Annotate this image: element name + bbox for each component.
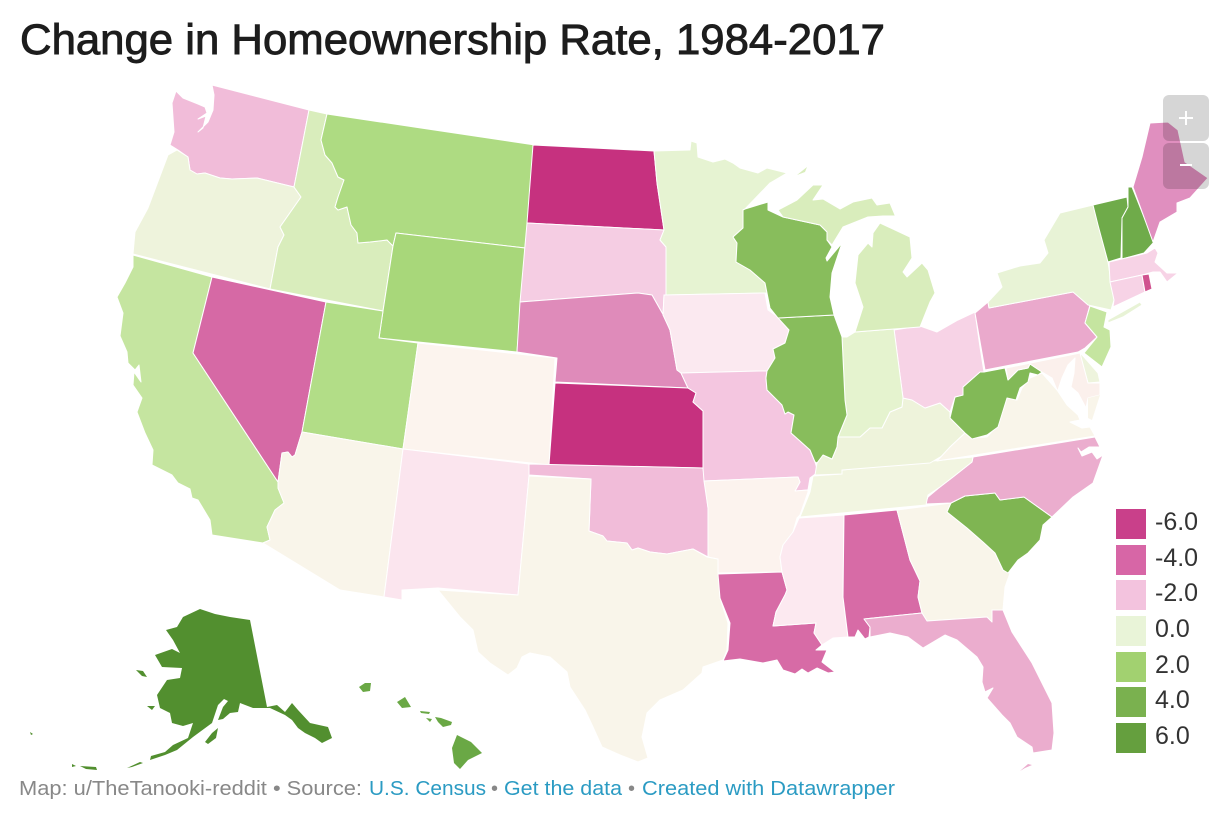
state: Wyoming	[379, 233, 525, 352]
state: Vermont	[1093, 197, 1128, 262]
state: Mississippi	[773, 515, 848, 645]
legend item: 4.0	[1116, 686, 1190, 717]
state: Tennessee	[800, 457, 973, 517]
state: Delaware	[1079, 352, 1100, 383]
state: West Virginia	[950, 347, 1042, 439]
footer credits: U.S. Census	[369, 778, 486, 800]
state: Nevada	[193, 277, 326, 482]
legend item: -6.0: -6.0	[1155, 508, 1198, 536]
legend item: 2.0: 2.0	[1155, 651, 1190, 679]
state: Wisconsin	[733, 202, 842, 318]
state: Missouri	[681, 371, 818, 491]
state: Michigan lower peninsula	[855, 223, 935, 332]
legend item: 0.0: 0.0	[1155, 615, 1190, 643]
legend item: -6.0	[1116, 508, 1198, 539]
footer credits: Map: u/TheTanooki-reddit • Source:	[19, 778, 362, 800]
state: Hawaii	[359, 683, 482, 769]
state: New Jersey	[1084, 306, 1111, 367]
legend item: 2.0	[1116, 651, 1190, 682]
Alaska mainland	[150, 609, 332, 760]
state: Virginia	[937, 373, 1095, 461]
legend item: 4.0: 4.0	[1155, 686, 1190, 714]
legend item: 6.0: 6.0	[1155, 722, 1190, 750]
Hawaii islands	[359, 683, 482, 769]
state: Pennsylvania	[975, 292, 1097, 370]
state: Louisiana	[718, 572, 835, 674]
state: Kentucky	[815, 398, 965, 475]
title: Change in Homeownership Rate, 1984-2017	[20, 16, 885, 64]
state: Arizona	[263, 432, 403, 597]
state: Idaho	[270, 110, 393, 311]
zoom control: minus button	[1163, 143, 1209, 189]
footer credits	[19, 778, 895, 800]
state: Oregon	[133, 150, 301, 289]
legend item: -4.0: -4.0	[1155, 544, 1198, 572]
legend item: -4.0	[1116, 544, 1198, 575]
footer credits: •	[628, 778, 635, 800]
legend	[1116, 508, 1198, 753]
state: California	[117, 255, 284, 543]
state: Maryland	[1006, 353, 1100, 408]
state: Virginia eastern shore	[1088, 395, 1100, 420]
state: Florida Keys	[1020, 764, 1032, 771]
state: Iowa	[663, 293, 789, 373]
state: Colorado	[403, 343, 555, 465]
footer credits: Get the data	[504, 778, 623, 800]
state: Alabama	[843, 510, 922, 639]
state: New Hampshire	[1122, 187, 1154, 259]
state: New York, Long Island	[1108, 302, 1142, 323]
state: North Dakota	[527, 145, 664, 230]
Alaska: Kodiak and islands	[30, 670, 218, 770]
state: Montana	[321, 114, 535, 248]
state: Oklahoma	[529, 464, 708, 557]
state: Minnesota	[654, 141, 787, 295]
state: Arkansas	[704, 477, 808, 573]
legend item: 0.0	[1116, 615, 1190, 646]
footer credits: Created with Datawrapper	[642, 778, 895, 800]
state: North Carolina	[925, 437, 1103, 517]
state: Michigan, Isle Royale	[797, 167, 807, 175]
state: Kansas	[549, 383, 703, 468]
state: Rhode Island	[1142, 274, 1152, 292]
state: South Carolina	[947, 493, 1052, 573]
state: Michigan upper peninsula	[778, 185, 903, 245]
state: Alaska	[30, 609, 332, 770]
footer credits: •	[491, 778, 498, 800]
state: Ohio	[894, 312, 984, 412]
state: Illinois	[766, 315, 847, 463]
legend item: -2.0	[1116, 579, 1198, 610]
state: Washington	[170, 85, 309, 187]
legend item: 6.0	[1116, 722, 1190, 753]
state: New York	[988, 205, 1114, 310]
state: Georgia	[897, 503, 1010, 622]
state: Massachusetts	[1109, 248, 1178, 282]
state: Connecticut	[1110, 275, 1145, 307]
state: Indiana	[838, 329, 903, 437]
state: Maine	[1133, 122, 1208, 242]
zoom control: plus button	[1163, 95, 1209, 141]
state: Utah	[302, 302, 418, 449]
state: New Mexico	[384, 449, 529, 600]
state: Nebraska	[517, 293, 688, 388]
state: Florida	[864, 610, 1054, 753]
state: South Dakota	[520, 223, 666, 318]
state: Texas	[438, 476, 728, 762]
legend item: -2.0: -2.0	[1155, 579, 1198, 607]
